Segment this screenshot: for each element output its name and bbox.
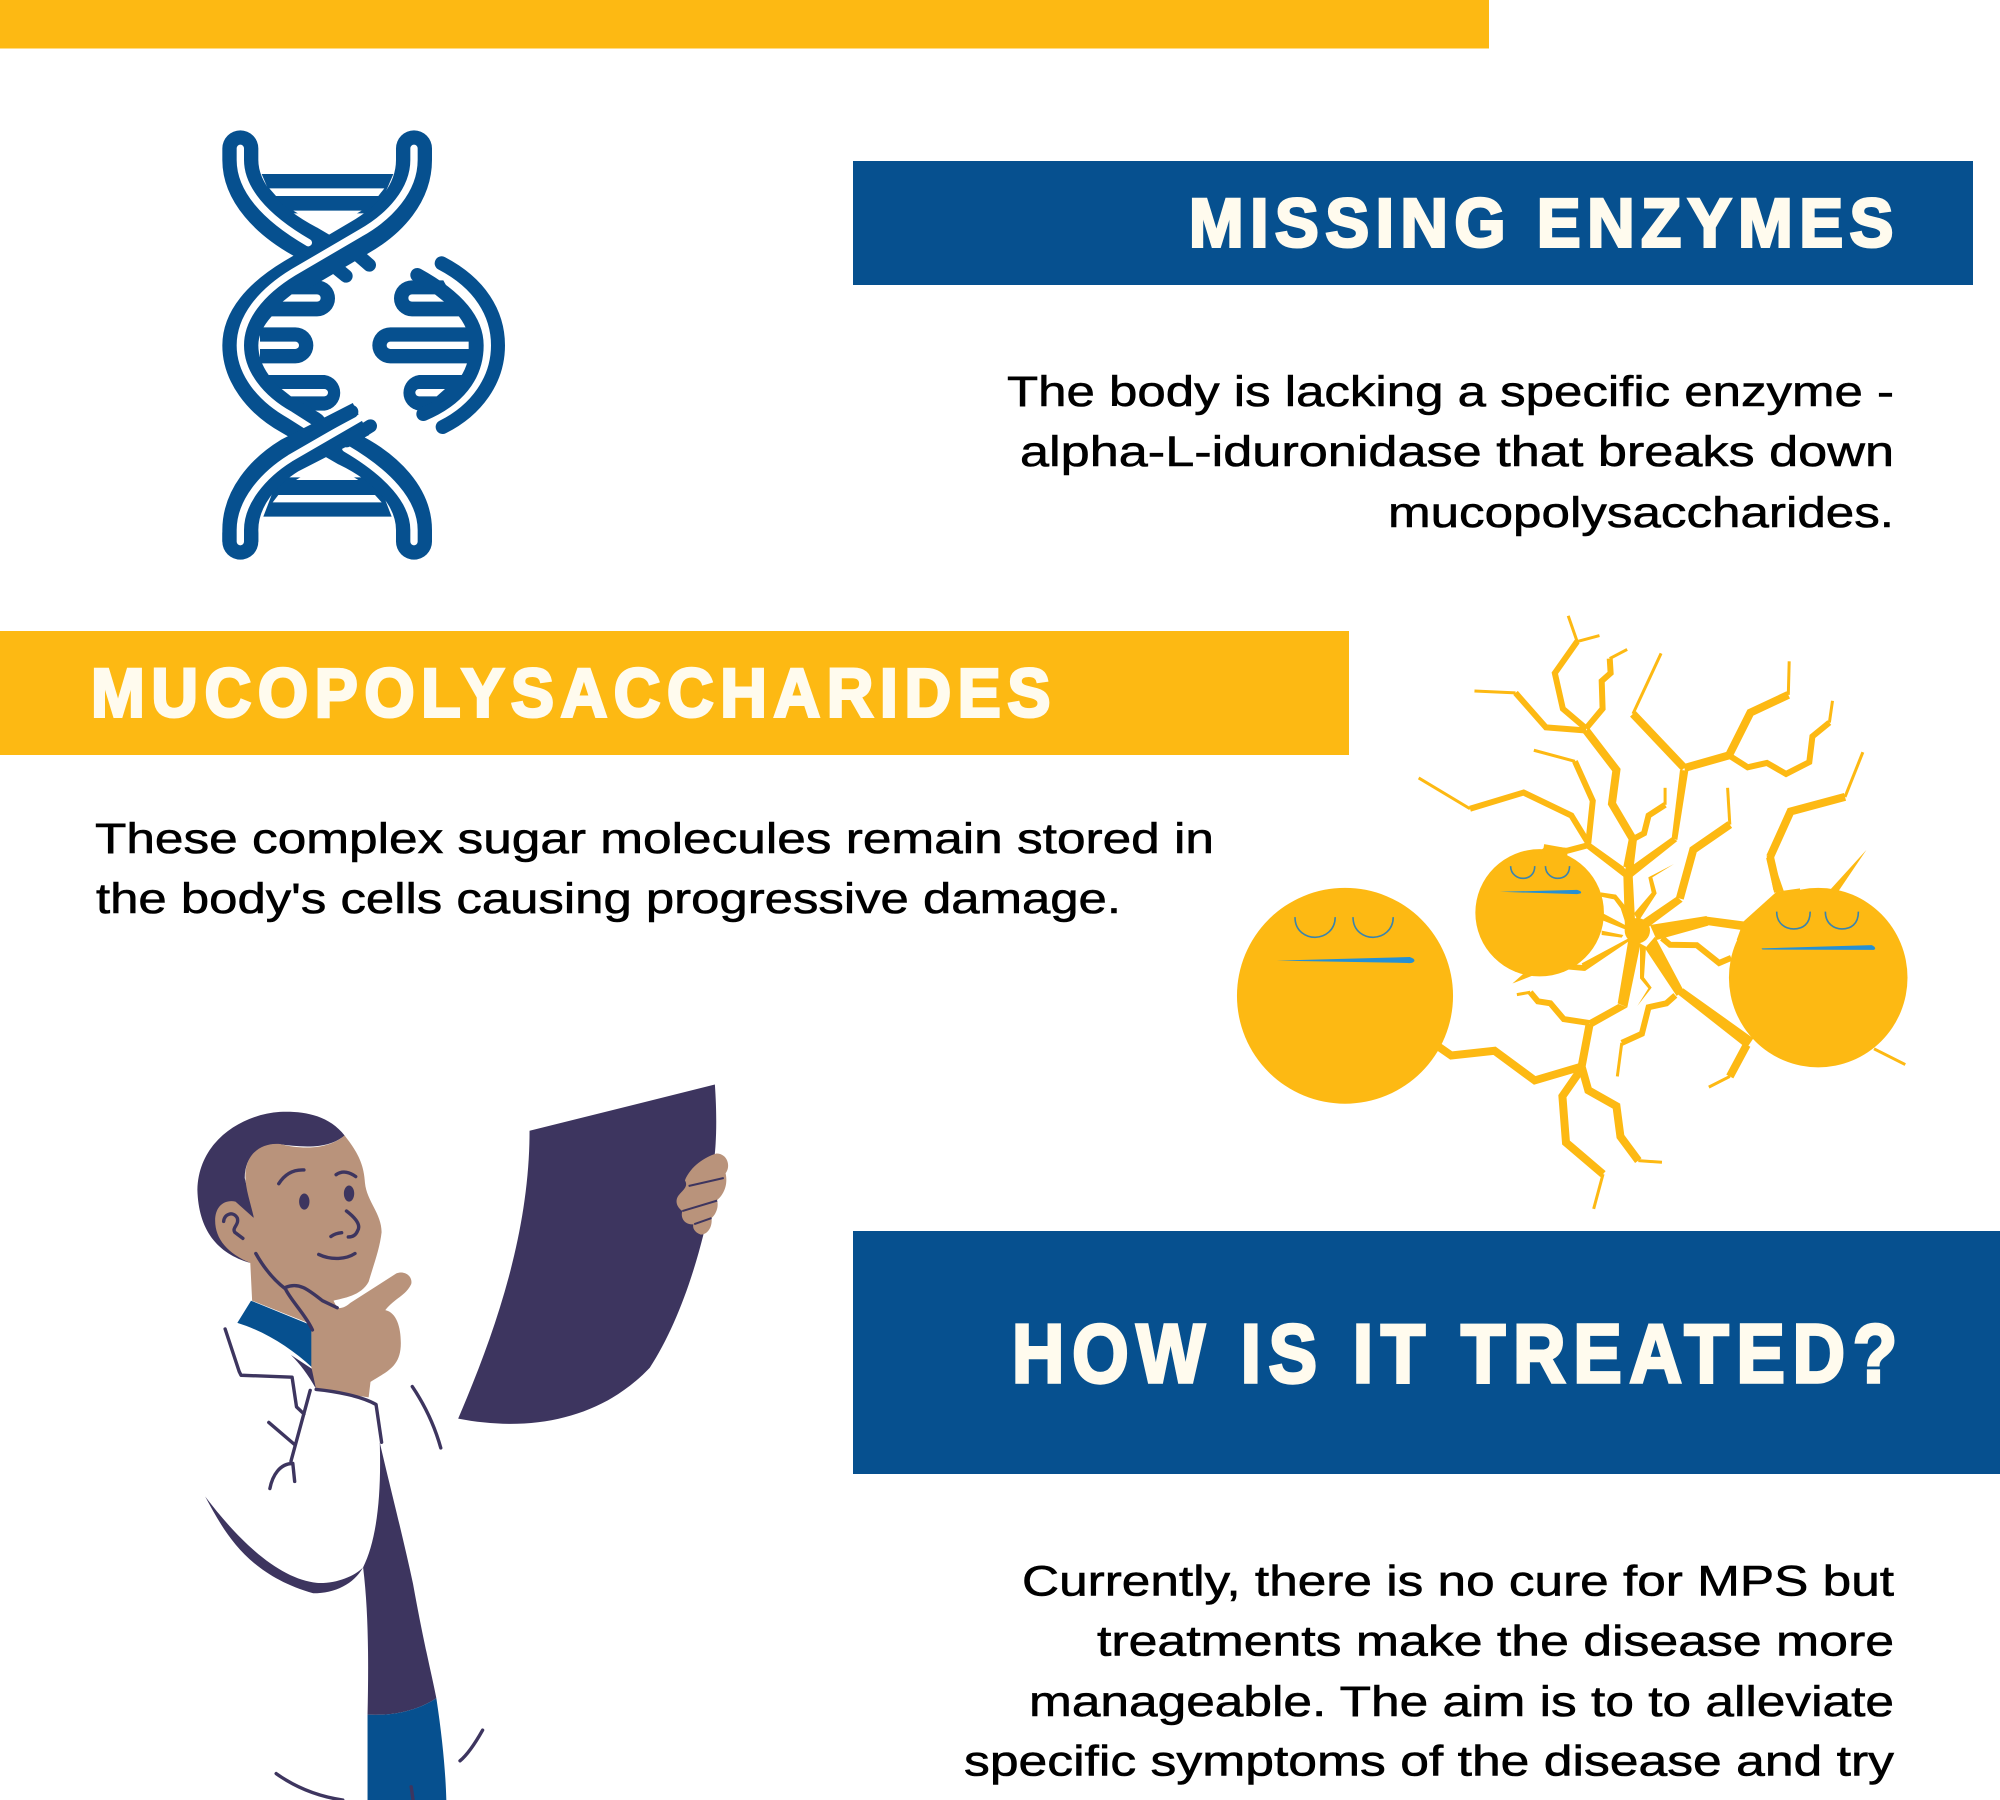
text: treatment description: specific symptoms of the disease and try xyxy=(964,1738,1895,1786)
collar xyxy=(237,1301,312,1368)
text: missing enzymes description: alpha-L-iduronidase that breaks down xyxy=(1020,428,1894,476)
panel: missing enzymes heading xyxy=(853,161,1973,285)
strand D xyxy=(240,419,361,542)
strand B xyxy=(240,148,414,428)
panel: mucopolysaccharides heading xyxy=(0,631,1349,755)
right detached strands xyxy=(417,263,498,427)
lab coat and stethoscope lines xyxy=(225,1329,483,1800)
text: treatment description xyxy=(964,1558,1895,1786)
text: treatment description: manageable. The aim is to to alleviate xyxy=(1029,1678,1894,1726)
coat shadow xyxy=(205,1497,363,1593)
hand holding sheet xyxy=(677,1153,728,1235)
panel: mucopolysaccharides heading: MUCOPOLYSACCHARIDES xyxy=(91,654,1057,732)
illustration: damaged cells xyxy=(1237,846,1908,1104)
text: treatment description: treatments make the disease more xyxy=(1097,1618,1894,1666)
illustration: central crack hub xyxy=(1567,770,1800,1048)
panel: how is it treated heading xyxy=(853,1231,2000,1474)
cell: middle xyxy=(1475,846,1604,984)
torso shirt xyxy=(363,1442,436,1715)
text: mucopolysaccharides description: the body's cells causing progressive damage. xyxy=(96,875,1121,923)
text: missing enzymes description xyxy=(1007,368,1894,537)
illustration: doctor reading x-ray xyxy=(197,1085,728,1800)
cell: left xyxy=(1237,888,1453,1104)
top yellow bar xyxy=(0,0,1489,48)
trousers xyxy=(368,1698,446,1800)
text: missing enzymes description: mucopolysaccharides. xyxy=(1388,489,1894,537)
text: missing enzymes description: The body is lacking a specific enzyme - xyxy=(1007,368,1894,416)
chin hand xyxy=(285,1272,411,1397)
text: mucopolysaccharides description xyxy=(95,815,1214,923)
broken stubs xyxy=(327,254,370,441)
strand E xyxy=(327,437,414,542)
panel: missing enzymes heading: MISSING ENZYMES xyxy=(1189,184,1900,262)
x-ray sheet xyxy=(458,1085,716,1424)
cell: right xyxy=(1729,850,1908,1067)
text: treatment description: Currently, there is no cure for MPS but xyxy=(1022,1558,1894,1606)
hair xyxy=(197,1112,345,1263)
text: mucopolysaccharides description: These complex sugar molecules remain stored in xyxy=(95,815,1214,863)
face details xyxy=(224,1170,359,1330)
strand A xyxy=(240,148,327,254)
illustration: crack branches xyxy=(1419,616,1905,1209)
icon: DNA helix with broken strand xyxy=(240,148,498,542)
head and neck xyxy=(215,1136,382,1324)
